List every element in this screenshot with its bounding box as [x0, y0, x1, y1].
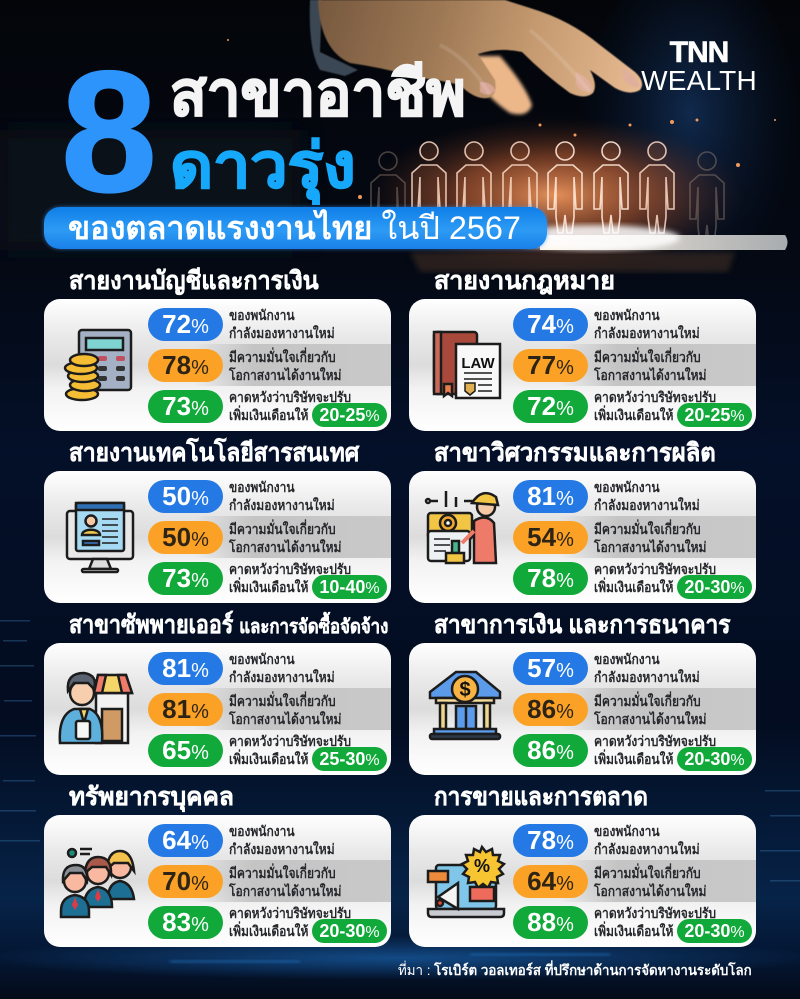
caption [229, 905, 351, 939]
subtitle banner: ของตลาดแรงงานไทย ในปี 2567 [68, 210, 521, 246]
caption: คาดหวังว่าบริษัทจะปรับ [229, 389, 351, 405]
raise range: 20-30% [684, 749, 745, 769]
caption: มีความมั่นใจเกี่ยวกับ [594, 693, 701, 709]
caption [594, 307, 700, 341]
heading: การขายและการตลาด [434, 783, 648, 811]
logo: TNN Wealth: TNN [670, 36, 728, 69]
caption: โอกาสงานได้งานใหม่ [594, 883, 706, 899]
caption: โอกาสงานได้งานใหม่ [229, 367, 341, 383]
caption: โอกาสงานได้งานใหม่ [229, 883, 341, 899]
blue stat: 78% [527, 825, 574, 855]
tablet [410, 225, 788, 272]
icon: law book and document: LAW [461, 355, 496, 372]
orange stat [148, 349, 223, 382]
caption: ของพนักงาน [594, 307, 660, 323]
green stat [148, 734, 223, 767]
blue stat: 57% [527, 653, 574, 683]
blue stat [148, 652, 223, 685]
green stat: 73% [162, 563, 209, 593]
caption [228, 691, 341, 727]
green stat [148, 390, 223, 423]
caption [594, 904, 732, 940]
heading: สาขาซัพพายเออร์ และการจัดซื้อจัดจ้าง [69, 611, 388, 639]
panel: legal [409, 267, 756, 431]
blue stat [148, 308, 223, 341]
icon: laptop with megaphone [426, 844, 506, 918]
panel: finance and banking [409, 611, 756, 775]
blue stat: 74% [527, 309, 574, 339]
caption: มีความมั่นใจเกี่ยวกับ [229, 693, 336, 709]
raise range: 20-30% [319, 921, 380, 941]
card [409, 643, 756, 775]
caption: กำลังมองหางานใหม่ [594, 497, 700, 513]
orange stat [513, 349, 588, 382]
heading: สายงานเทคโนโลยีสารสนเทศ [69, 439, 359, 467]
icon: bank building: $ [459, 679, 471, 701]
caption [229, 389, 351, 423]
blue stat: 81% [162, 653, 209, 683]
sparks [227, 39, 776, 199]
heading: ทรัพยากรบุคคล [69, 783, 234, 811]
green stat [148, 562, 223, 595]
icon: bank building [428, 670, 502, 740]
heading: สาขาวิศวกรรมและการผลิต [434, 439, 716, 467]
caption: เพิ่มเงินเดือนให้ [229, 923, 308, 939]
green stat: 83% [162, 907, 209, 937]
caption [228, 863, 341, 899]
orange stat [148, 521, 223, 554]
orange stat: 70% [162, 866, 209, 896]
caption: โอกาสงานได้งานใหม่ [594, 539, 706, 555]
caption [594, 479, 700, 513]
side data lights [0, 620, 800, 882]
orange stat: 50% [162, 522, 209, 552]
raise range [677, 919, 752, 943]
title: ดาวรุ่ง: ดาวรุ่ง [170, 132, 356, 201]
orange stat [148, 865, 223, 898]
panel: information technology [44, 437, 391, 603]
caption: กำลังมองหางานใหม่ [229, 669, 335, 685]
icon: engineer with gear [424, 491, 500, 564]
caption: ของพนักงาน [229, 823, 295, 839]
caption [594, 519, 706, 555]
caption: ของพนักงาน [229, 307, 295, 323]
caption: เพิ่มเงินเดือนให้ [594, 923, 673, 939]
caption [228, 347, 341, 383]
panel: supplier and procurement [44, 610, 391, 775]
caption: มีความมั่นใจเกี่ยวกับ [229, 521, 336, 537]
raise range [677, 403, 752, 427]
caption: ของพนักงาน [229, 479, 295, 495]
caption [228, 519, 341, 555]
blue stat [513, 652, 588, 685]
raise range: 20-30% [684, 921, 745, 941]
caption: โอกาสงานได้งานใหม่ [229, 539, 341, 555]
orange stat [513, 693, 588, 726]
card [44, 299, 391, 431]
title: big number 8: 8 [61, 36, 157, 228]
caption: คาดหวังว่าบริษัทจะปรับ [594, 561, 716, 577]
raise range [677, 747, 752, 771]
icon: shop seller [58, 672, 134, 744]
icon: calculator and coins [64, 328, 132, 402]
caption [229, 561, 351, 595]
caption: คาดหวังว่าบริษัทจะปรับ [229, 561, 351, 577]
caption: เพิ่มเงินเดือนให้ [229, 579, 308, 595]
caption: ของพนักงาน [229, 651, 295, 667]
raise range: 20-30% [684, 577, 745, 597]
orange stat: 54% [527, 522, 574, 552]
blue stat [148, 824, 223, 857]
green stat [513, 734, 588, 767]
caption [594, 691, 706, 727]
heading: สายงานกฎหมาย [434, 267, 615, 295]
blue stat: 50% [162, 481, 209, 511]
orange stat [513, 865, 588, 898]
caption: มีความมั่นใจเกี่ยวกับ [229, 865, 336, 881]
caption: เพิ่มเงินเดือนให้ [594, 751, 673, 767]
caption [229, 479, 335, 513]
blue stat [513, 480, 588, 513]
caption: กำลังมองหางานใหม่ [594, 841, 700, 857]
heading: สาขาการเงิน และการธนาคาร [434, 611, 731, 639]
orange stat [513, 521, 588, 554]
green stat: 88% [527, 907, 574, 937]
caption: เพิ่มเงินเดือนให้ [229, 407, 308, 423]
caption: มีความมั่นใจเกี่ยวกับ [594, 521, 701, 537]
green stat: 78% [527, 563, 574, 593]
green stat [513, 906, 588, 939]
heading: สายงานบัญชีและการเงิน [69, 267, 319, 295]
panel: human resources [44, 783, 391, 947]
caption: กำลังมองหางานใหม่ [229, 497, 335, 513]
card [44, 815, 391, 947]
caption: โอกาสงานได้งานใหม่ [229, 711, 341, 727]
caption: ของพนักงาน [594, 651, 660, 667]
caption [594, 561, 716, 595]
blue stat [513, 308, 588, 341]
caption [594, 389, 716, 423]
caption [229, 307, 335, 341]
panel: sales and marketing [409, 783, 756, 947]
central glow [365, 117, 745, 273]
blue stat: 72% [162, 309, 209, 339]
caption: คาดหวังว่าบริษัทจะปรับ [229, 905, 351, 921]
caption: เพิ่มเงินเดือนให้ [594, 579, 673, 595]
caption [594, 347, 706, 383]
caption: ของพนักงาน [594, 823, 660, 839]
blue stat [148, 480, 223, 513]
logo: TNN Wealth: WEALTH [641, 65, 757, 96]
raise range [312, 575, 387, 599]
title: สาขาอาชีพ: สาขาอาชีพ [170, 60, 466, 129]
caption [229, 823, 335, 857]
caption [594, 864, 732, 900]
raise range [312, 747, 387, 771]
caption: โอกาสงานได้งานใหม่ [594, 711, 706, 727]
source note: ที่มา : โรเบิร์ต วอลเทอร์ส ที่ปรึกษาด้านการจัดหางานระดับโลก [398, 962, 752, 978]
orange stat: 86% [527, 694, 574, 724]
orange stat [148, 693, 223, 726]
raise range [677, 575, 752, 599]
green stat [513, 390, 588, 423]
logo: TNN Wealth [641, 36, 757, 96]
caption: เพิ่มเงินเดือนให้ [229, 751, 308, 767]
caption: มีความมั่นใจเกี่ยวกับ [594, 349, 701, 365]
icon: laptop with megaphone: % [474, 856, 490, 876]
orange stat: 81% [162, 694, 209, 724]
orange stat: 77% [527, 350, 574, 380]
caption: มีความมั่นใจเกี่ยวกับ [594, 865, 701, 881]
green stat: 72% [527, 391, 574, 421]
panel: engineering and manufacturing [409, 439, 756, 603]
caption [594, 651, 700, 685]
card [409, 299, 756, 431]
raise range: 20-25% [684, 405, 745, 425]
caption [594, 733, 716, 767]
shirt cuff [310, 0, 358, 76]
green stat: 86% [527, 735, 574, 765]
raise range: 20-25% [319, 405, 380, 425]
panel: accounting and finance [44, 267, 391, 431]
icon: law book and document [432, 330, 502, 400]
card [44, 471, 391, 603]
caption [229, 651, 335, 685]
orange stat: 64% [527, 866, 574, 896]
hand [318, 0, 642, 114]
raise range: 25-30% [319, 749, 380, 769]
caption: กำลังมองหางานใหม่ [594, 669, 700, 685]
caption: คาดหวังว่าบริษัทจะปรับ [229, 733, 351, 749]
raise range [312, 403, 387, 427]
caption: คาดหวังว่าบริษัทจะปรับ [594, 389, 716, 405]
caption: กำลังมองหางานใหม่ [229, 841, 335, 857]
green stat: 73% [162, 391, 209, 421]
caption: กำลังมองหางานใหม่ [594, 325, 700, 341]
green stat: 65% [162, 735, 209, 765]
card [44, 643, 391, 775]
icon: three staff members [60, 848, 136, 918]
caption: โอกาสงานได้งานใหม่ [594, 367, 706, 383]
caption: มีความมั่นใจเกี่ยวกับ [229, 349, 336, 365]
blue stat: 81% [527, 481, 574, 511]
card [409, 815, 756, 947]
raise range: 10-40% [319, 577, 380, 597]
blue stat [513, 824, 588, 857]
caption [229, 733, 351, 767]
caption: คาดหวังว่าบริษัทจะปรับ [594, 905, 716, 921]
caption: กำลังมองหางานใหม่ [229, 325, 335, 341]
caption [594, 823, 700, 857]
card [409, 471, 756, 603]
caption: ของพนักงาน [594, 479, 660, 495]
green stat [148, 906, 223, 939]
raise range [312, 919, 387, 943]
glowing people [371, 142, 724, 243]
caption: คาดหวังว่าบริษัทจะปรับ [594, 733, 716, 749]
icon: computer with profile [66, 502, 134, 574]
green stat [513, 562, 588, 595]
caption: เพิ่มเงินเดือนให้ [594, 407, 673, 423]
blue stat: 64% [162, 825, 209, 855]
orange stat: 78% [162, 350, 209, 380]
